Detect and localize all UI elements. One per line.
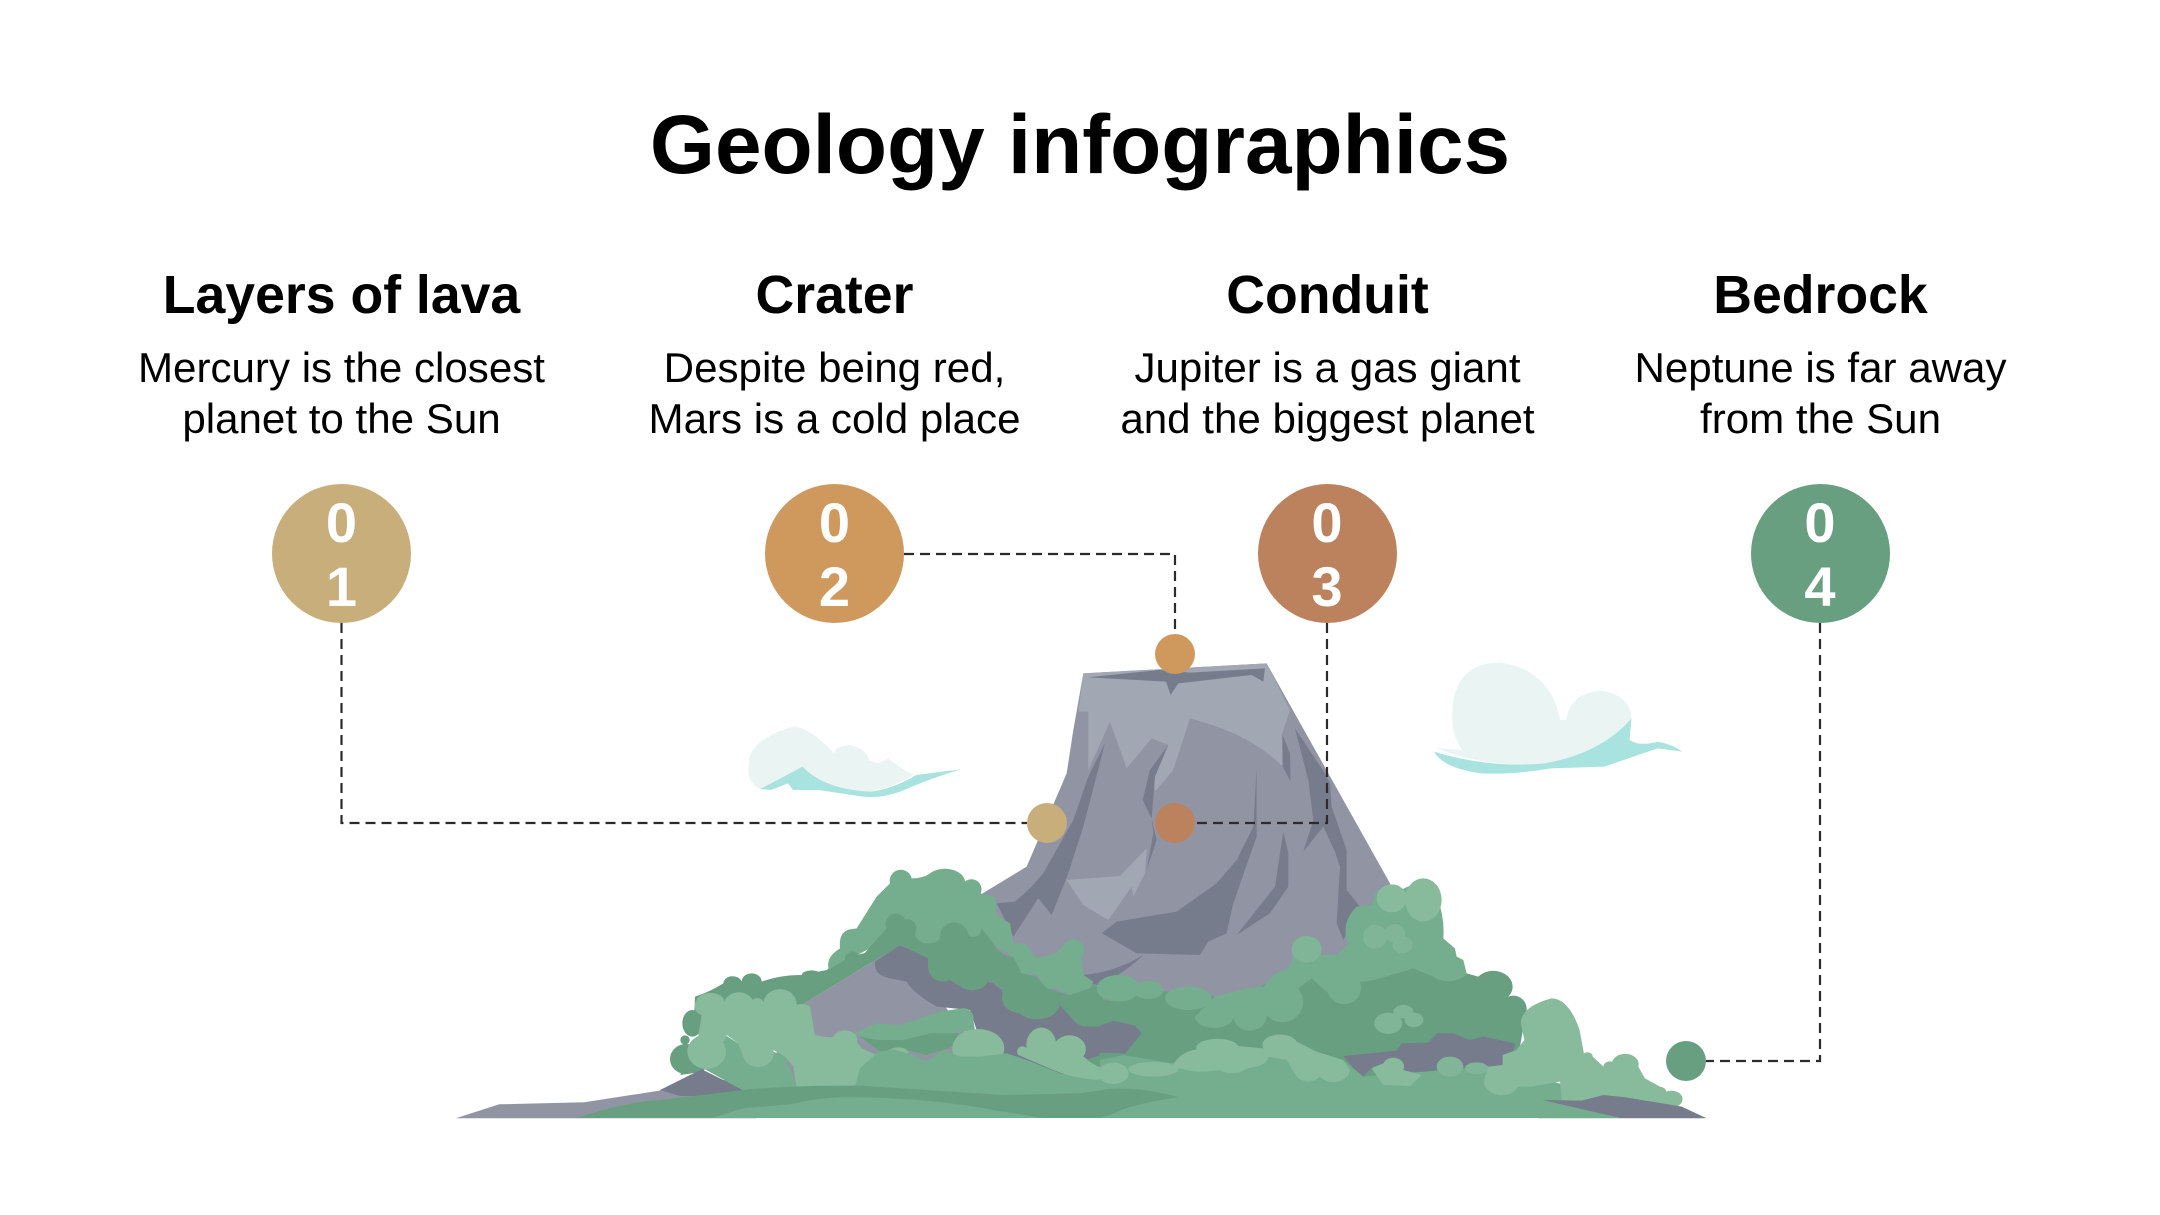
text: Conduit: Jupiter is a gas giant (1134, 344, 1521, 391)
right vegetation (1097, 878, 1600, 1118)
text: Layers of lava: planet to the Sun (182, 395, 501, 442)
text: Crater: Mars is a cold place (648, 395, 1020, 442)
left and centre vegetation (576, 869, 1143, 1118)
number circle 01: 01 (326, 491, 357, 618)
far right vegetation and rock (1484, 998, 1707, 1118)
number circle 04 (1750, 484, 1890, 623)
text: Bedrock: Neptune is far away (1634, 344, 2007, 391)
cloud left (748, 727, 960, 797)
number circle 04: 04 (1804, 491, 1836, 618)
text: Layers of lava (138, 344, 545, 442)
heading: Crater: Crater (756, 265, 913, 325)
volcano rock (973, 663, 1427, 1020)
title: Geology infographics (650, 97, 1510, 191)
connector 02 (904, 554, 1175, 634)
number circle 03: 03 (1311, 491, 1343, 618)
cloud right (1434, 662, 1682, 774)
number circle 02: 02 (819, 491, 850, 618)
text: Conduit (1120, 344, 1535, 442)
text: Bedrock (1634, 344, 2007, 442)
number circle 03 (1258, 484, 1396, 623)
connector 04 (1706, 623, 1820, 1061)
marker 02 (1155, 634, 1195, 674)
marker 01 (1027, 803, 1067, 843)
heading: Conduit: Conduit (1226, 265, 1429, 325)
heading: Layers of lava: Layers of lava (163, 265, 520, 325)
connector 01 (342, 623, 1027, 823)
text: Crater (648, 344, 1020, 442)
far left foothill (456, 1080, 756, 1118)
text: Bedrock: from the Sun (1700, 395, 1941, 442)
text: Layers of lava: Mercury is the closest (138, 344, 545, 391)
marker 03 (1155, 803, 1195, 843)
number circle 02 (765, 484, 904, 623)
marker 04 (1666, 1041, 1706, 1081)
text: Crater: Despite being red, (664, 344, 1005, 391)
text: Conduit: and the biggest planet (1120, 395, 1535, 442)
number circle 01 (272, 484, 411, 623)
connector 03 (1195, 623, 1327, 823)
heading: Bedrock: Bedrock (1713, 265, 1928, 325)
